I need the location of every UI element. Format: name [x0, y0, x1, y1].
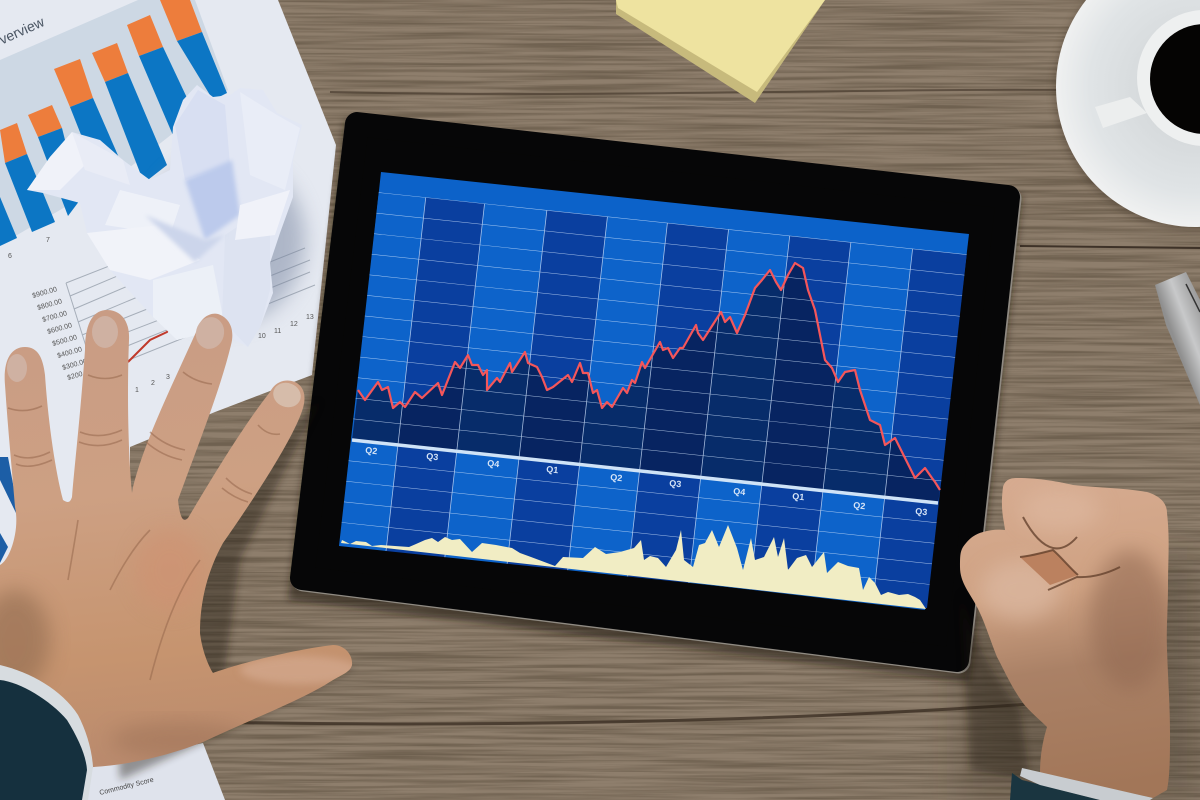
line chart on paper: 2	[151, 380, 155, 387]
line chart on paper: $900.00	[32, 286, 58, 300]
bar chart background	[0, 0, 228, 245]
line chart on paper: $400.00	[57, 346, 83, 360]
quarter labels: Q4	[487, 458, 500, 469]
hand shading	[0, 584, 352, 758]
tablet device	[302, 124, 1010, 662]
quarter labels: Q1	[546, 464, 559, 475]
tablet screen chart	[339, 172, 969, 610]
quarter labels: Q1	[792, 491, 805, 502]
silver pen	[1155, 272, 1200, 405]
fingernails	[7, 354, 27, 382]
small blue bars on paper under left hand	[0, 457, 16, 563]
paper with overview bar chart: 7	[46, 237, 50, 244]
line chart on paper: 10	[258, 333, 266, 340]
line chart on paper	[32, 248, 315, 394]
line chart on paper: 13	[306, 314, 314, 321]
line chart on paper: $700.00	[42, 310, 68, 324]
paper under left wrist: Commodity Score	[99, 777, 155, 797]
left hand shadow	[100, 400, 355, 780]
finger creases	[1020, 517, 1120, 590]
quarter labels: Q4	[733, 486, 746, 497]
fist shading	[980, 488, 1170, 690]
line chart on paper: 1	[135, 387, 139, 394]
line chart on paper: $500.00	[52, 334, 78, 348]
line chart on paper: $800.00	[37, 298, 63, 312]
quarter labels: Q3	[426, 451, 439, 462]
line chart on paper: $300.00	[62, 358, 88, 372]
line chart on paper: $600.00	[47, 322, 73, 336]
quarter labels: Q2	[365, 445, 378, 456]
right hand fist	[960, 478, 1170, 798]
white axis line	[352, 440, 938, 503]
quarter labels: Q2	[610, 472, 623, 483]
chart grid columns	[339, 193, 967, 608]
knuckle creases	[8, 372, 280, 680]
chart grid lines	[339, 193, 967, 608]
bar chart axis labels: 6	[8, 253, 12, 260]
crumpled paper ball	[27, 85, 305, 347]
left hand	[0, 310, 360, 767]
coffee cup on saucer	[1054, 0, 1200, 231]
paper under left wrist	[80, 743, 225, 800]
sticky note pad	[616, 0, 825, 103]
quarter labels: Q2	[853, 500, 866, 511]
paper with overview bar chart	[0, 0, 336, 580]
quarter labels	[365, 445, 928, 517]
line chart on paper: 11	[274, 328, 281, 335]
left sleeve and shirt cuff	[0, 665, 93, 800]
quarter labels: Q3	[669, 478, 682, 489]
line chart on paper: 3	[166, 374, 170, 381]
folded thumb segment	[1020, 550, 1078, 585]
dark area under price line	[352, 263, 940, 503]
right shirt cuff and sleeve	[1010, 768, 1153, 800]
tablet drop shadow	[288, 120, 1022, 682]
bar chart	[0, 0, 227, 246]
volume histogram	[341, 525, 926, 609]
line chart on paper: $200	[67, 371, 84, 382]
red price line	[358, 263, 940, 490]
line chart on paper: 12	[290, 321, 298, 328]
quarter labels: Q3	[915, 506, 928, 517]
right hand fist shadow	[960, 580, 1030, 780]
